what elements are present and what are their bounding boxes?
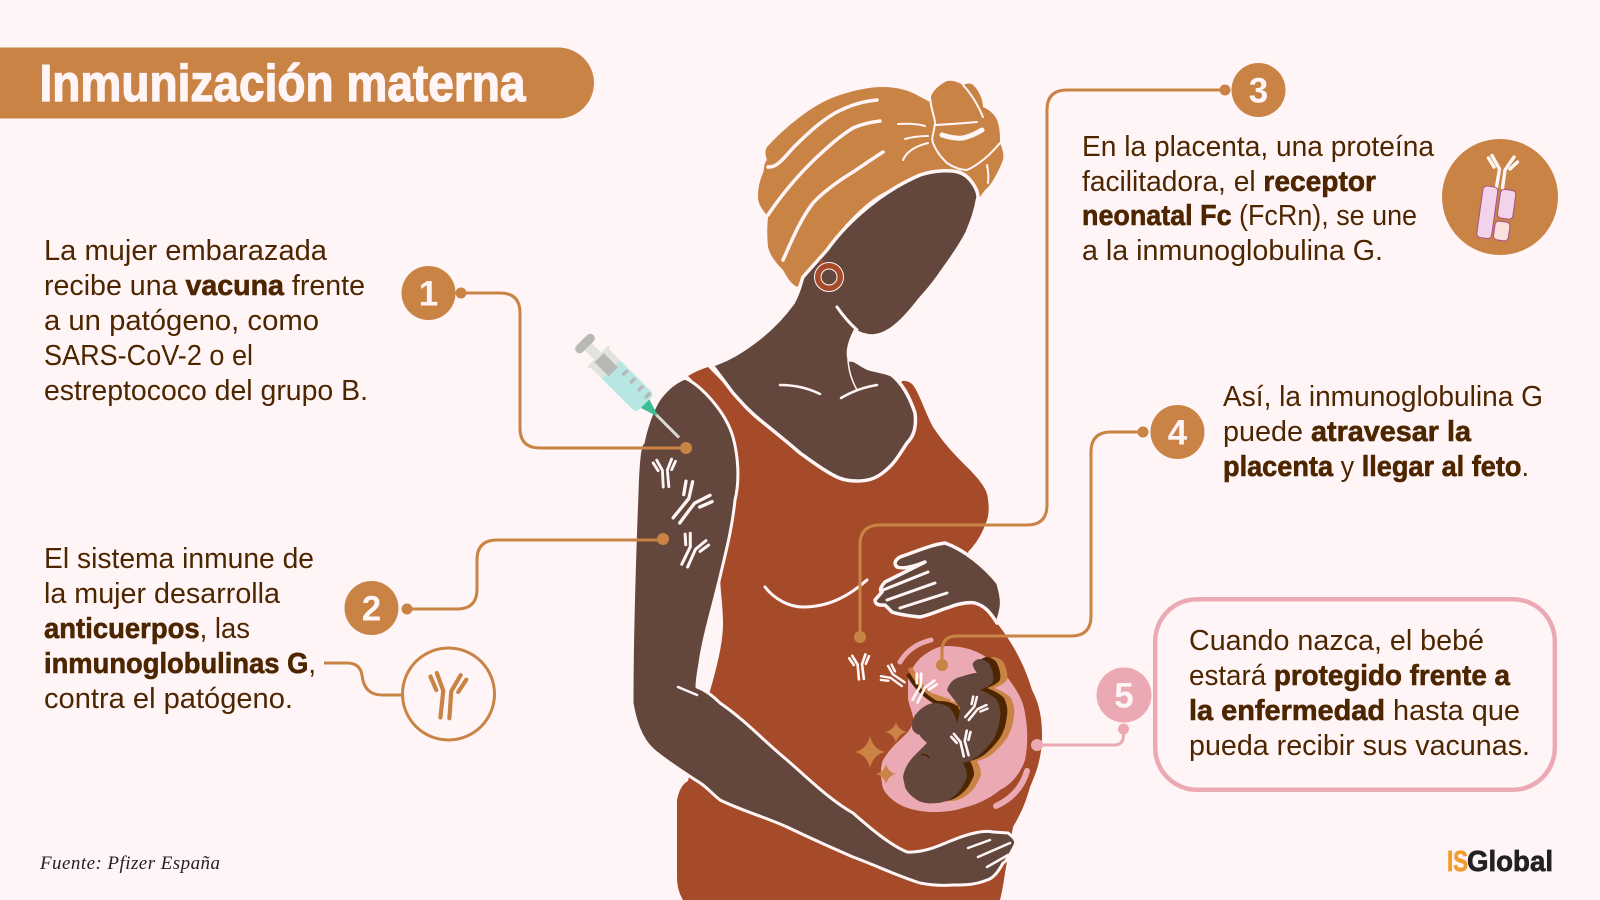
logo: ISGlobal: Global [1467,846,1553,878]
fetus [903,657,1014,803]
step 5: callout box [1155,599,1555,790]
amniotic arcs [900,640,1027,806]
step 1: text: a un patógeno, como [44,305,319,337]
syringe [571,330,690,448]
step 4: anchor dot [936,659,948,671]
step 4: text: Así, la inmunoglobulina G [1223,381,1543,413]
step 3: text: neonatal Fc (FcRn), se une [1082,200,1417,232]
step 3: badge [1220,63,1286,117]
uterus [881,646,1027,812]
step 2: badge: 2 [362,590,381,628]
step 5: text: la enfermedad hasta que [1189,695,1520,727]
arm [632,378,1016,885]
step 4: leader line [942,432,1143,665]
sparkles [855,722,907,784]
step 1: anchor dot [680,442,692,454]
step 4: text [1223,381,1543,483]
step 5: text [1189,625,1530,762]
step 4: badge [1138,405,1204,459]
step 5: badge: 5 [1114,676,1134,716]
step 1: badge: 1 [419,274,438,314]
earring [814,260,844,292]
step 5: text: Cuando nazca, el bebé [1189,625,1484,657]
step 3: text [1082,131,1435,267]
step 1: text [44,235,368,407]
step 2: text: anticuerpos, las [44,613,250,645]
logo: ISGlobal: IS [1447,846,1468,878]
step 5: anchor dot [1031,739,1043,751]
body crease lines [710,307,877,607]
step 3: text: a la inmunoglobulina G. [1082,235,1383,267]
step 3: badge: 3 [1249,72,1268,110]
dress [677,367,1042,900]
illustration: pregnant woman [571,81,1042,900]
step 2: text: El sistema inmune de [44,543,314,575]
step 5: text: estará protegido frente a [1189,660,1511,692]
step 3: text: facilitadora, el receptor [1082,166,1376,198]
step 1: badge [402,266,466,320]
turban folds [768,85,1000,260]
step 3: leader line [860,90,1225,637]
step 5: text: pueda recibir sus vacunas. [1189,730,1530,762]
step 3: text: En la placenta, una proteína [1082,131,1435,163]
step 2: leader line [407,540,663,609]
step 1: text: recibe una vacuna frente [44,270,365,302]
step 1: text: estreptococo del grupo B. [44,375,368,407]
step 4: text: puede atravesar la [1223,416,1472,448]
step 4: text: placenta y llegar al feto. [1223,451,1529,483]
step 1: text: SARS-CoV-2 o el [44,340,253,372]
step 2: text: inmunoglobulinas G, [44,648,316,680]
source: Fuente: Pfizer España [39,853,220,874]
turban [758,81,1003,287]
step 5: leader line [1037,729,1124,745]
step 4: badge: 4 [1168,414,1188,452]
step 2: text [44,543,316,715]
step 2: badge [344,581,412,635]
lower hand finger lines [678,687,1010,867]
step 5: badge [1096,668,1152,734]
head, neck and chest [712,171,978,481]
upper hand [875,543,1002,623]
antibodies [653,459,989,758]
step 2: text: la mujer desarrolla [44,578,281,610]
step 3: anchor dot [854,631,866,643]
step 2: antibody icon [324,648,494,740]
step 1: text: La mujer embarazada [44,235,328,267]
title: Inmunización materna [40,55,526,113]
step 2: anchor dot [657,533,669,545]
step 1: leader line [461,293,686,448]
step 2: text: contra el patógeno. [44,683,293,715]
step 3: receptor icon [1442,139,1558,255]
